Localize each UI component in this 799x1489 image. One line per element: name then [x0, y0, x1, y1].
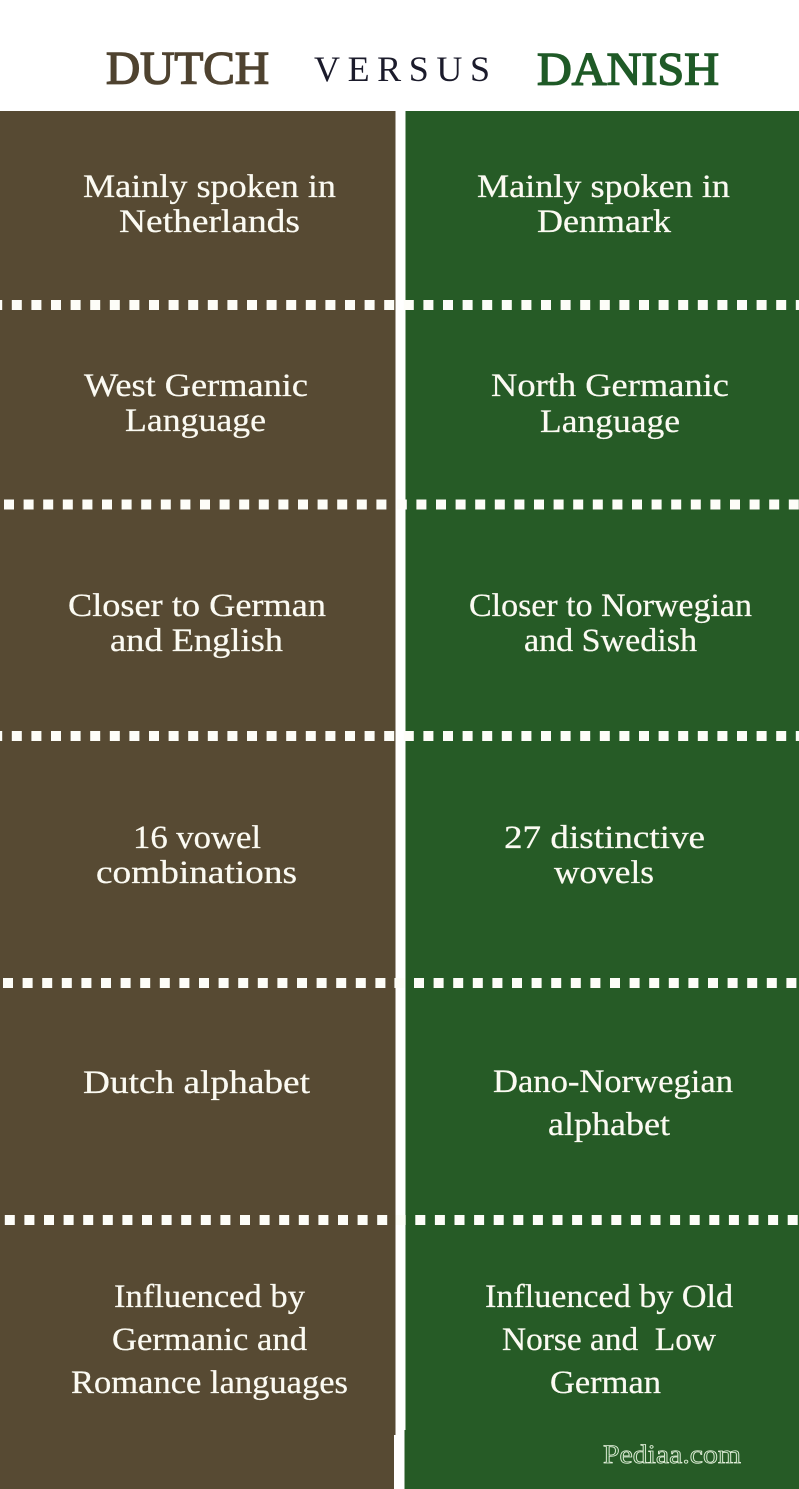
- text: Dutch region: [83, 169, 336, 240]
- text: Danish closest languages: and Swedish: [524, 623, 698, 659]
- text: Danish alphabet: Dano-Norwegian: [493, 1064, 733, 1100]
- text: Danish region: Mainly spoken in: [477, 169, 730, 205]
- text: Danish influences: German: [550, 1365, 661, 1401]
- text: Dutch vowels: combinations: [96, 855, 297, 891]
- text: Dutch vowels: 16 vowel: [133, 820, 261, 856]
- text: Danish region: [477, 169, 730, 240]
- text: Dutch region: Mainly spoken in: [83, 169, 336, 205]
- title: [106, 42, 719, 96]
- panel: Dutch column: [0, 111, 396, 1489]
- logo: Pediaa.com: Pediaa.com: [603, 1440, 741, 1469]
- text: Danish influences: Influenced by Old: [485, 1279, 734, 1315]
- heading: Dutch: DUTCH: [106, 42, 269, 94]
- text: Danish vowels: [504, 820, 705, 891]
- text: Dutch vowels: [96, 820, 297, 891]
- heading: versus: VERSUS: [314, 49, 490, 89]
- text: Danish vowels: wovels: [554, 855, 654, 891]
- panel: Danish column: [404, 111, 799, 1489]
- text: Danish vowels: 27 distinctive: [504, 820, 705, 856]
- text: Danish influences: [485, 1279, 734, 1401]
- text: Dutch influences: [71, 1279, 348, 1401]
- text: Danish region: Denmark: [537, 204, 672, 240]
- text: Danish closest languages: Closer to Norwegian: [469, 588, 752, 624]
- text: Danish language family: Language: [540, 404, 680, 440]
- text: Dutch alphabet: Dutch alphabet: [83, 1065, 310, 1101]
- text: Dutch language family: West Germanic: [84, 368, 308, 404]
- text: Dutch closest languages: Closer to German: [68, 588, 326, 624]
- dotted row dividers: [0, 305, 799, 1220]
- text: Danish language family: North Germanic: [491, 368, 729, 404]
- heading: Danish: DANISH: [537, 44, 719, 96]
- text: Dutch closest languages: and English: [110, 623, 284, 659]
- text: Dutch closest languages: [68, 588, 326, 659]
- text: Danish alphabet: [493, 1064, 733, 1143]
- text: Dutch region: Netherlands: [119, 204, 300, 240]
- text: Dutch influences: Influenced by: [114, 1279, 306, 1315]
- text: Danish influences: Norse and Low: [502, 1322, 716, 1358]
- text: Danish alphabet: alphabet: [548, 1107, 670, 1143]
- text: Dutch influences: Germanic and: [112, 1322, 308, 1358]
- text: Danish language family: [491, 368, 729, 440]
- text: Danish closest languages: [469, 588, 752, 659]
- text: Dutch influences: Romance languages: [71, 1365, 348, 1401]
- text: Dutch language family: [84, 368, 308, 439]
- text: Dutch language family: Language: [125, 403, 266, 439]
